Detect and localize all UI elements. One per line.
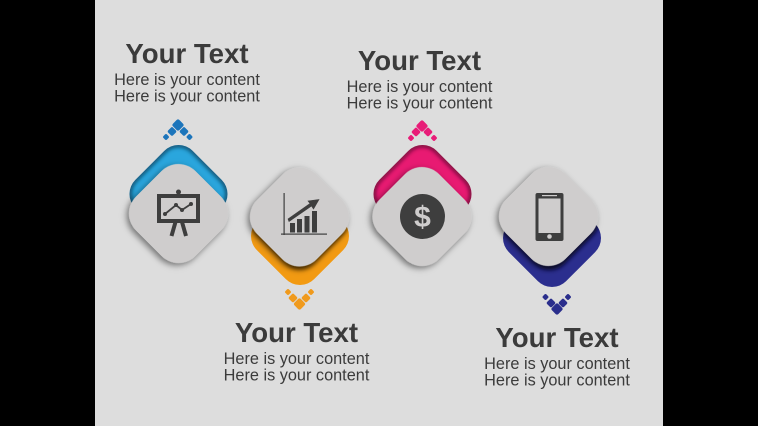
text block: bottom left: Here is your content: [224, 366, 370, 384]
text block: bottom left: Your Text: [235, 317, 358, 348]
icon: dollar coin: $: [414, 201, 431, 234]
icon: smartphone: [536, 193, 564, 241]
colour backing: blue: [130, 145, 228, 203]
text block: top left: [114, 38, 260, 106]
text block: top middle: [347, 45, 493, 112]
diamond card 3: [363, 157, 481, 276]
diamond card 1: [119, 154, 238, 273]
text block: bottom left: Here is your content: [224, 350, 370, 368]
diamond card 4: [489, 157, 608, 276]
text block: top left: Here is your content: [114, 71, 260, 89]
text block: bottom right: Here is your content: [484, 355, 630, 373]
dots: navy: [542, 293, 572, 315]
icon: dollar coin: [400, 194, 445, 239]
text block: top middle: Here is your content: [347, 94, 493, 112]
dots: blue: [162, 119, 193, 141]
icon: presentation board: [159, 190, 198, 236]
diamond card 2: [240, 158, 359, 276]
text block: top middle: Here is your content: [347, 78, 493, 96]
text block: top left: Your Text: [125, 38, 249, 69]
dots: pink: [407, 120, 438, 142]
text block: bottom left: [224, 317, 370, 384]
text block: bottom right: Your Text: [495, 322, 619, 353]
colour backing: orange: [251, 226, 349, 285]
colour backing: pink: [374, 145, 472, 205]
background panel: [95, 0, 663, 426]
colour backing: navy: [503, 225, 601, 287]
text block: bottom right: Here is your content: [484, 372, 630, 390]
text block: top middle: Your Text: [358, 45, 481, 76]
icon: bar chart with arrow: [281, 193, 327, 235]
text block: bottom right: [484, 322, 630, 390]
text block: top left: Here is your content: [114, 88, 260, 106]
dots: orange: [284, 288, 315, 310]
